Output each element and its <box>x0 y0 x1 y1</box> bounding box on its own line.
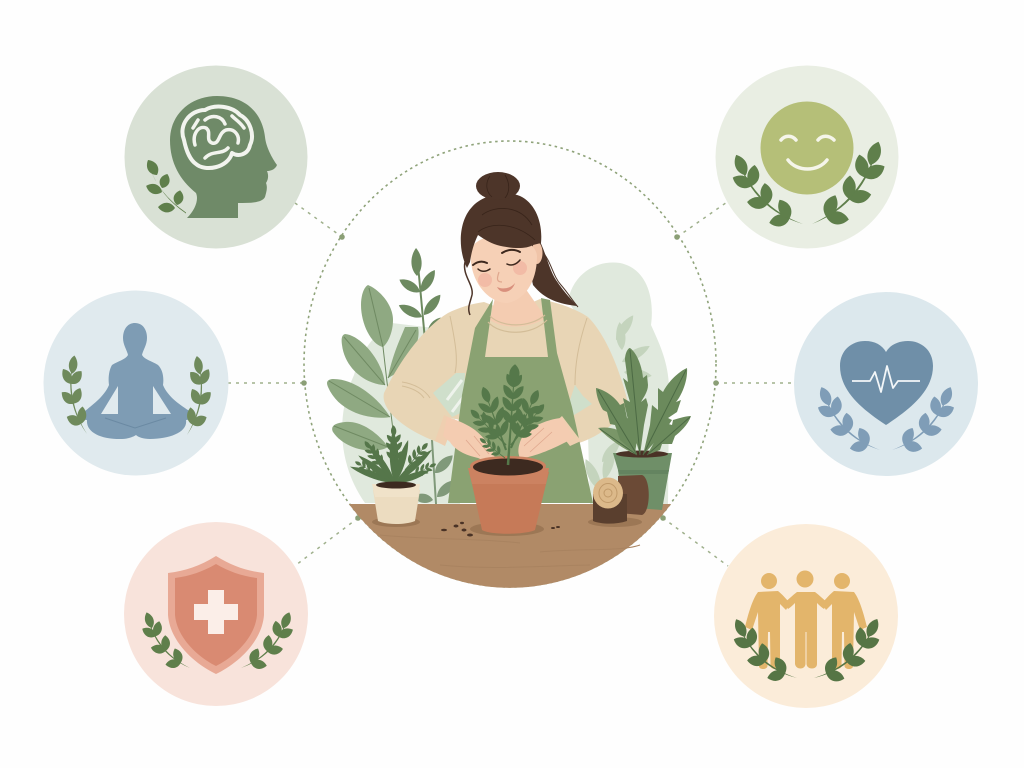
plant and pot: cream left <box>349 425 439 524</box>
icon: heart <box>840 341 933 425</box>
big leaves <box>327 285 419 451</box>
nose and mouth <box>497 272 502 282</box>
brows and eyes <box>473 250 520 271</box>
laurels <box>52 353 219 438</box>
woman <box>384 172 628 503</box>
logs <box>593 475 649 524</box>
top sprig <box>397 248 444 340</box>
icon: smiling face <box>760 102 854 194</box>
icon badge: shield <box>124 522 308 706</box>
collar <box>488 315 547 332</box>
table <box>349 504 671 588</box>
icon: brain <box>182 107 252 168</box>
arm gaps <box>433 373 592 420</box>
laurel <box>144 157 186 214</box>
laurels <box>717 611 897 697</box>
connectors <box>228 200 795 566</box>
icon: shield <box>168 556 264 674</box>
cuffs <box>435 415 455 446</box>
neck <box>490 288 546 327</box>
ring nodes <box>301 234 719 521</box>
loose strand <box>465 262 472 315</box>
back hair <box>528 232 577 306</box>
laurels <box>713 133 905 244</box>
face <box>532 242 542 264</box>
icon: meditating figure <box>80 323 192 439</box>
cross <box>194 590 238 634</box>
icon badge: community <box>714 524 898 708</box>
background blobs <box>342 262 669 504</box>
icon badge: heart <box>794 292 978 476</box>
icon badge: meditation <box>44 290 228 476</box>
panel: central illustration <box>301 141 719 588</box>
hands <box>443 417 574 460</box>
plant and pot: terracotta centre <box>463 363 553 534</box>
sleeve creases <box>402 316 587 398</box>
apron <box>448 298 593 503</box>
laurels <box>801 380 971 468</box>
icon badge: smile <box>713 66 905 248</box>
soil crumbs <box>441 522 560 536</box>
icon: three people <box>745 570 867 669</box>
shadows <box>372 517 642 536</box>
hair bun <box>476 172 520 200</box>
wood grain <box>380 535 640 567</box>
right background sprig <box>581 313 652 492</box>
plant and pot: green right <box>596 348 691 510</box>
dashed ring <box>304 141 716 587</box>
sweater body <box>384 299 628 503</box>
front hair <box>461 193 541 268</box>
back left plant <box>327 248 459 505</box>
laurels <box>128 606 308 683</box>
lower sprig <box>413 440 459 505</box>
icon: head <box>170 96 277 218</box>
icon badge: brain <box>124 66 308 248</box>
